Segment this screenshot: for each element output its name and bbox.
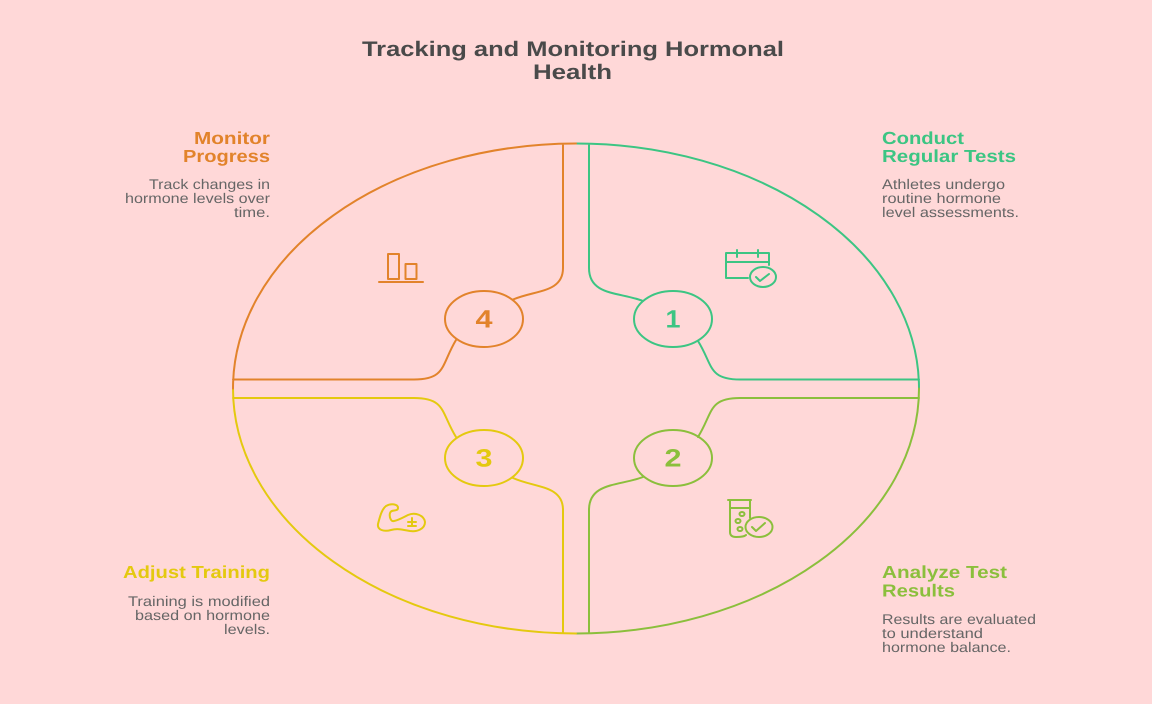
title: Tracking and Monitoring Hormonal <box>362 38 784 61</box>
panel: step 1 segment <box>576 144 919 388</box>
text block: analyze test results: Results <box>882 580 955 600</box>
text block: adjust training: based on hormone <box>135 607 270 623</box>
title <box>362 38 784 84</box>
text block: monitor progress: time. <box>234 204 270 220</box>
step 4 number circle <box>445 291 523 347</box>
step 1 number: 1 <box>666 306 681 334</box>
text block: adjust training: levels. <box>224 621 270 637</box>
text block: monitor progress: hormone levels over <box>125 190 270 206</box>
step 3 number: 3 <box>476 444 492 472</box>
text block: conduct regular tests: Athletes undergo <box>882 176 1005 192</box>
step 3 number circle <box>445 430 523 486</box>
step 4 number: 4 <box>476 306 493 334</box>
text block: monitor progress: Track changes in <box>149 176 270 192</box>
text block: monitor progress <box>125 128 270 220</box>
text block: conduct regular tests: level assessments. <box>882 204 1019 220</box>
text block: conduct regular tests: Conduct <box>882 128 964 148</box>
step 2 number: 2 <box>664 444 682 472</box>
text block: analyze test results: hormone balance. <box>882 639 1011 655</box>
icon: flexed arm <box>378 504 425 531</box>
step 2 number circle <box>634 430 712 486</box>
text block: analyze test results: Results are evaluated <box>882 611 1036 627</box>
panel: step 3 segment <box>233 388 576 634</box>
text block: monitor progress: Monitor <box>194 128 270 148</box>
text block: analyze test results: to understand <box>882 625 983 641</box>
text block: analyze test results <box>882 562 1036 655</box>
panel: step 2 segment <box>576 388 919 634</box>
step 1 number circle <box>634 291 712 347</box>
text block: adjust training: Training is modified <box>128 593 270 609</box>
icon: test tube with check <box>728 500 772 537</box>
text block: conduct regular tests: routine hormone <box>882 190 1001 206</box>
icon: calendar with check <box>726 250 776 287</box>
text block: adjust training <box>123 562 270 637</box>
icon: bar chart <box>379 254 423 282</box>
text block: monitor progress: Progress <box>183 146 270 166</box>
panel: step 4 segment <box>233 144 576 388</box>
text block: conduct regular tests <box>882 128 1019 220</box>
text block: adjust training: Adjust Training <box>123 562 270 582</box>
text block: analyze test results: Analyze Test <box>882 562 1007 582</box>
title: Health <box>533 61 612 84</box>
text block: conduct regular tests: Regular Tests <box>882 146 1016 166</box>
